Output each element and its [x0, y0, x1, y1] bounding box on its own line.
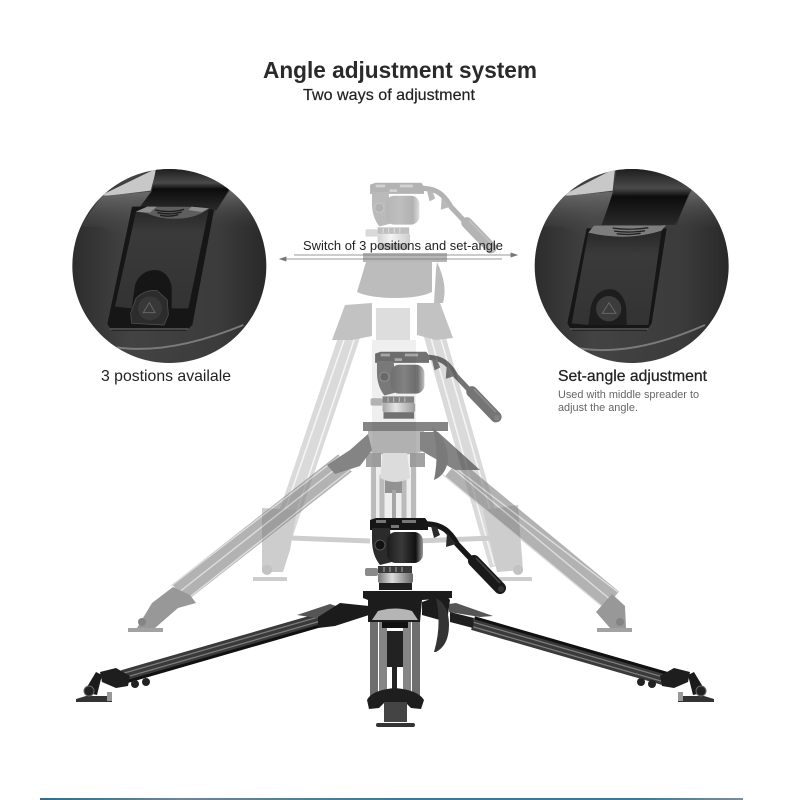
middle brackets and lever — [327, 432, 480, 474]
hub and top plate — [363, 591, 452, 628]
right foot — [637, 668, 714, 702]
spider base and ground foot — [367, 688, 424, 727]
subtitle: Two ways of adjustment — [303, 87, 476, 104]
label: switch of 3 positions: Switch of 3 positions and set-angle — [303, 238, 503, 253]
fluid head and pan handle — [365, 518, 504, 592]
right leg bracket and lever — [422, 594, 493, 652]
bottom rule — [40, 798, 743, 800]
left carbon leg — [121, 613, 322, 684]
front tripod (lowest position) — [76, 518, 714, 727]
back legs — [272, 320, 500, 565]
centre column tubes — [370, 622, 420, 700]
arrow: pointing left — [280, 257, 502, 261]
back hub — [357, 262, 432, 298]
description: set-angle adjustment: Used with middle spreader to — [558, 389, 699, 401]
middle hub — [363, 422, 448, 482]
left foot — [76, 668, 150, 702]
middle legs — [179, 463, 612, 600]
back feet — [262, 505, 523, 572]
circle photo: 3 positions latch — [70, 167, 273, 367]
back spreader — [290, 538, 493, 541]
title: Angle adjustment system — [263, 57, 537, 83]
right carbon leg — [471, 616, 672, 687]
middle feet — [137, 587, 626, 628]
back tripod (faded, tallest position) — [253, 183, 532, 579]
back column — [372, 340, 416, 530]
middle tripod (faded, mid position) — [128, 352, 632, 630]
middle column — [370, 453, 417, 521]
description: set-angle adjustment: adjust the angle. — [558, 402, 638, 414]
circle photo: set-angle latch — [533, 167, 733, 367]
caption: 3 positions: 3 postions availale — [101, 368, 231, 385]
arrow: pointing right — [294, 253, 517, 257]
caption: set-angle adjustment: Set-angle adjustment — [558, 368, 708, 385]
left leg bracket — [297, 603, 369, 628]
